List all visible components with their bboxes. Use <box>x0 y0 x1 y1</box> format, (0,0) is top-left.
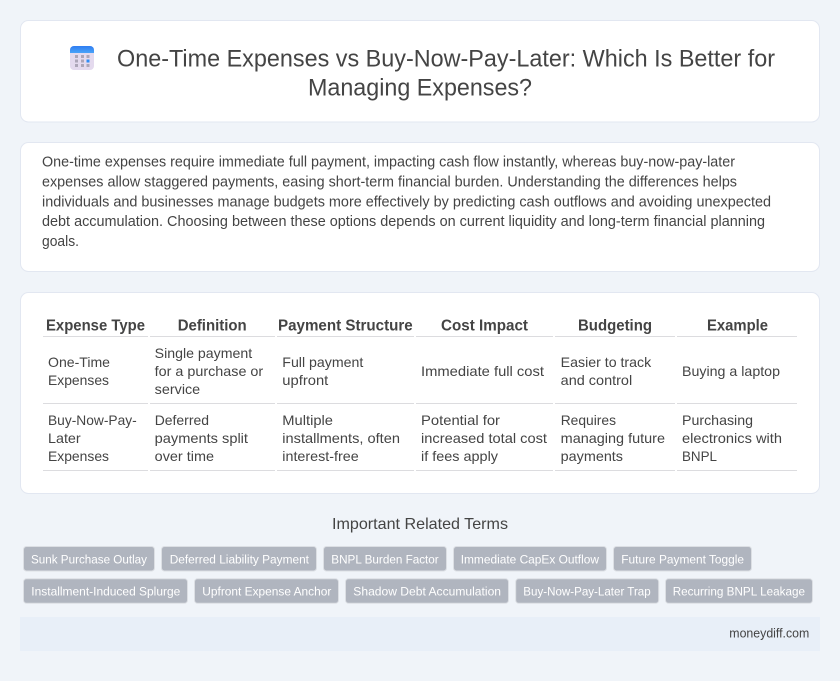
table header row: Payment Structure <box>278 318 413 335</box>
tag: Buy-Now-Pay-Later Trap: Buy-Now-Pay-Later Trap <box>523 585 651 599</box>
tag: Sunk Purchase Outlay <box>24 546 154 571</box>
tag: Sunk Purchase Outlay: Sunk Purchase Outlay <box>31 552 148 566</box>
table row: buy-now-pay-later expenses: Deferred <box>155 412 209 428</box>
table header row: Budgeting <box>578 318 652 335</box>
header panel <box>20 20 820 122</box>
icon: calendar <box>70 46 94 70</box>
table row: buy-now-pay-later expenses: over time <box>155 448 214 464</box>
table row: one-time expenses: Single payment <box>155 345 252 361</box>
summary text: expenses allow staggered payments, easing short-term financial burden. Understanding the differences helps <box>42 174 737 190</box>
table row: buy-now-pay-later expenses: increased total cost <box>421 430 547 446</box>
summary text <box>42 155 771 250</box>
table row: one-time expenses: upfront <box>282 372 328 388</box>
summary text: individuals and businesses manage budgets more effectively by predicting cash outflows and avoiding unexpected <box>42 194 771 210</box>
tag: Recurring BNPL Leakage: Recurring BNPL Leakage <box>673 585 805 599</box>
table row: buy-now-pay-later expenses: interest-free <box>282 448 359 464</box>
table row: buy-now-pay-later expenses: payments <box>561 448 623 464</box>
table row: buy-now-pay-later expenses: Later <box>48 430 81 446</box>
tag: Immediate CapEx Outflow: Immediate CapEx Outflow <box>461 552 599 566</box>
tag: BNPL Burden Factor <box>324 546 446 571</box>
table header row: Expense Type <box>46 318 145 335</box>
table row: buy-now-pay-later expenses <box>48 412 782 464</box>
table row: buy-now-pay-later expenses: installments, often <box>282 430 400 446</box>
tag: Deferred Liability Payment: Deferred Liability Payment <box>170 552 310 566</box>
table row: buy-now-pay-later expenses: Potential for <box>421 412 500 428</box>
tag: Future Payment Toggle: Future Payment Toggle <box>621 552 744 566</box>
table row: buy-now-pay-later expenses: Multiple <box>282 412 333 428</box>
title <box>117 46 775 102</box>
table row: one-time expenses: Full payment <box>282 354 363 370</box>
title: One-Time Expenses vs Buy-Now-Pay-Later: Which Is Better for <box>117 46 775 72</box>
table row: buy-now-pay-later expenses: Buy-Now-Pay- <box>48 412 137 428</box>
tag: Installment-Induced Splurge: Installment-Induced Splurge <box>31 585 180 599</box>
table row: one-time expenses <box>48 345 780 397</box>
tag: Upfront Expense Anchor: Upfront Expense Anchor <box>202 585 331 599</box>
table row: one-time expenses: service <box>155 381 200 397</box>
table row: one-time expenses: Easier to track <box>561 354 652 370</box>
table row: buy-now-pay-later expenses: Requires <box>561 412 616 428</box>
panel: comparison table <box>20 292 820 494</box>
table row: buy-now-pay-later expenses: managing future <box>561 430 665 446</box>
tag: Upfront Expense Anchor <box>194 579 338 603</box>
summary text: debt accumulation. Choosing between these options depends on current liquidity and long-term financial planning <box>42 214 765 230</box>
heading: important related terms: Important Related Terms <box>332 516 508 533</box>
table row: one-time expenses: for a purchase or <box>155 363 264 379</box>
tag: BNPL Burden Factor: BNPL Burden Factor <box>331 552 439 566</box>
title: Managing Expenses? <box>308 74 532 102</box>
panel: summary paragraph <box>20 142 820 272</box>
tag: Deferred Liability Payment <box>162 546 316 571</box>
table row: one-time expenses: Buying a laptop <box>682 363 780 379</box>
table row: buy-now-pay-later expenses: Expenses <box>48 448 109 464</box>
tag: Recurring BNPL Leakage <box>666 579 812 603</box>
table row: buy-now-pay-later expenses: if fees apply <box>421 448 498 464</box>
table row: buy-now-pay-later expenses: BNPL <box>682 448 717 464</box>
footer site name: moneydiff.com <box>729 627 809 641</box>
table row: buy-now-pay-later expenses: payments split <box>155 430 248 446</box>
table row: buy-now-pay-later expenses: Purchasing <box>682 412 753 428</box>
tag: Future Payment Toggle <box>614 546 752 571</box>
summary text: One-time expenses require immediate full payment, impacting cash flow instantly, whereas buy-now-pay-later <box>42 155 735 171</box>
tag: Installment-Induced Splurge <box>24 579 188 603</box>
table header row <box>46 318 768 335</box>
table row: buy-now-pay-later expenses: electronics with <box>682 430 782 446</box>
tag: Shadow Debt Accumulation: Shadow Debt Accumulation <box>353 585 501 599</box>
table row: one-time expenses: and control <box>561 372 632 388</box>
summary text: goals. <box>42 234 79 250</box>
table row: one-time expenses: Immediate full cost <box>421 363 544 379</box>
table header row: Definition <box>178 318 247 335</box>
footer bar <box>20 617 820 651</box>
table header row: Cost Impact <box>441 318 529 335</box>
tag: Immediate CapEx Outflow <box>454 546 606 571</box>
related term tags <box>24 546 812 603</box>
table header row: Example <box>707 318 768 335</box>
tag: Buy-Now-Pay-Later Trap <box>516 579 659 603</box>
table row: one-time expenses: One-Time <box>48 354 110 370</box>
tag: Shadow Debt Accumulation <box>346 579 508 603</box>
table row: one-time expenses: Expenses <box>48 372 109 388</box>
